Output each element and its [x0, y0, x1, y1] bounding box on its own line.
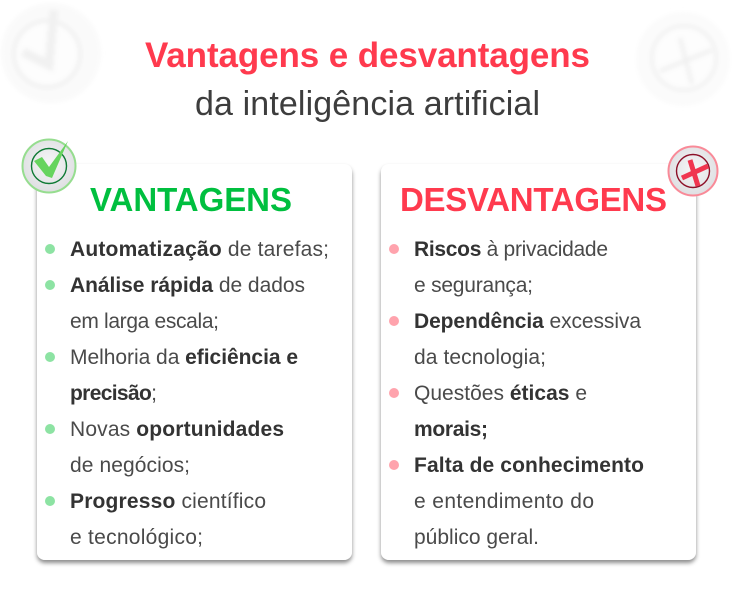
- icon: red cross badge: [668, 146, 718, 196]
- title: da inteligência artificial: [195, 85, 540, 123]
- list: desvantagens: e entendimento do: [414, 490, 594, 513]
- list: desvantagens: [389, 238, 644, 549]
- list: desvantagens: Dependência excessiva: [414, 310, 641, 333]
- panel: vantagens: [37, 164, 352, 560]
- panel: desvantagens: [381, 164, 696, 560]
- title: [145, 36, 590, 123]
- list: desvantagens: Questões éticas e: [414, 382, 587, 405]
- list: vantagens: e tecnológico;: [70, 526, 203, 549]
- list: desvantagens: morais;: [414, 418, 488, 441]
- list: vantagens: precisão;: [70, 382, 157, 405]
- heading: desvantagens: DESVANTAGENS: [400, 181, 667, 218]
- heading: vantagens: VANTAGENS: [90, 181, 292, 218]
- faded check icon, top left: [1, 3, 101, 103]
- list: desvantagens: Falta de conhecimento: [414, 454, 644, 477]
- list: vantagens: de negócios;: [70, 454, 190, 477]
- list: vantagens: [45, 238, 329, 549]
- faded cross icon, top right: [636, 12, 730, 106]
- list: vantagens: Progresso científico: [70, 490, 266, 513]
- list: vantagens: em larga escala;: [70, 310, 219, 333]
- list: vantagens: Novas oportunidades: [70, 418, 284, 441]
- list: vantagens: Melhoria da eficiência e: [70, 346, 298, 369]
- list: desvantagens: e segurança;: [414, 274, 533, 297]
- title: Vantagens e desvantagens: [145, 36, 590, 75]
- list: desvantagens: Riscos à privacidade: [414, 238, 608, 261]
- list: vantagens: Análise rápida de dados: [70, 274, 305, 297]
- list: desvantagens: público geral.: [414, 526, 539, 549]
- list: vantagens: Automatização de tarefas;: [70, 238, 329, 261]
- list: desvantagens: da tecnologia;: [414, 346, 546, 369]
- icon: green check badge: [22, 140, 76, 192]
